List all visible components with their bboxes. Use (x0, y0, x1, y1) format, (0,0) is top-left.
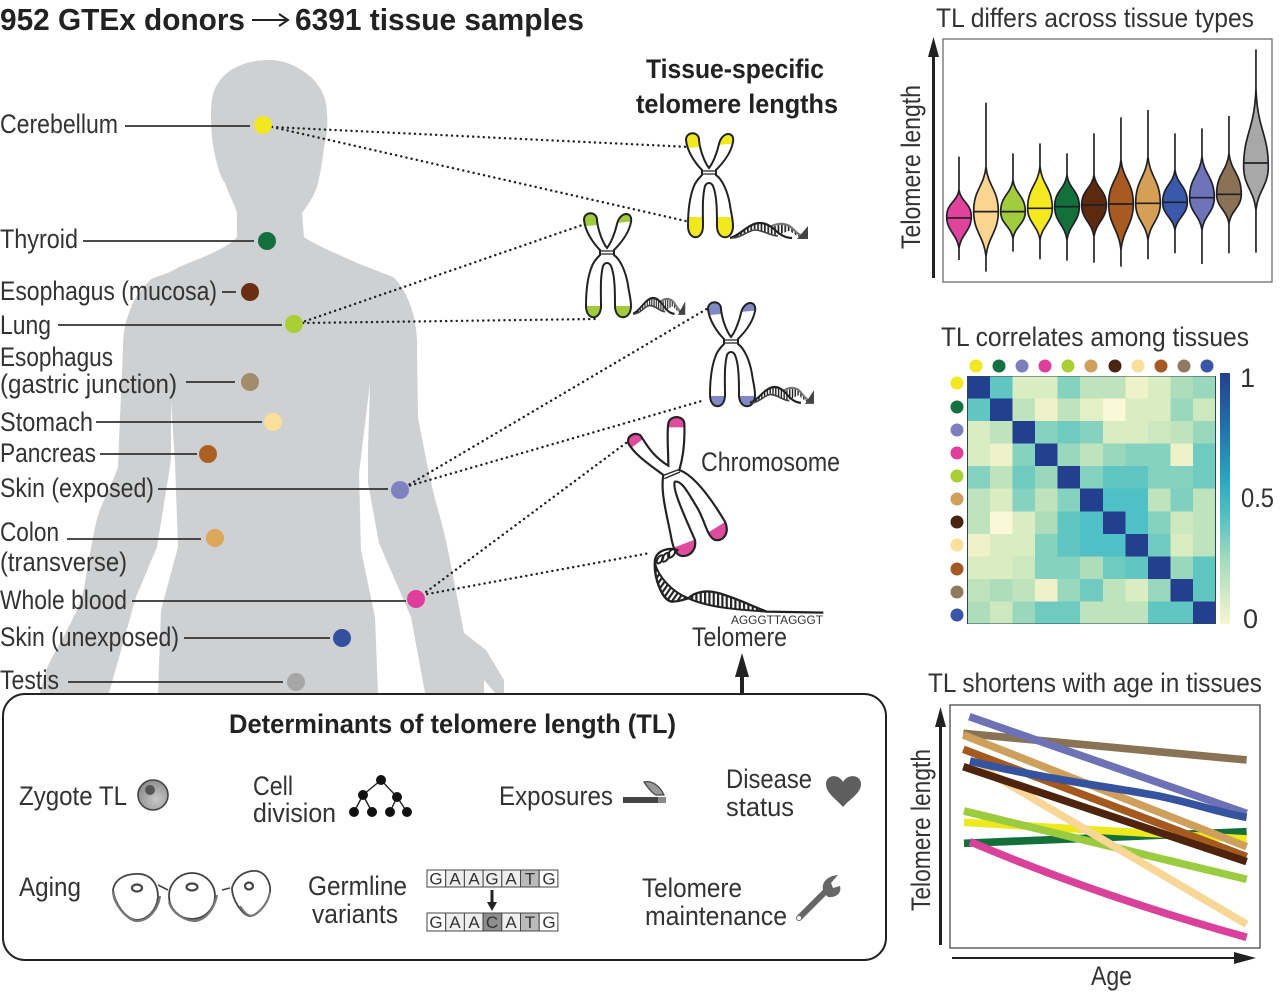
axis label: Telomere length (896, 85, 926, 249)
leader lines (58, 126, 406, 682)
item: aging: Aging (19, 872, 81, 902)
labels: tissue names: Esophagus (0, 342, 113, 372)
labels: tissue names: Thyroid (0, 224, 78, 254)
labels: tissue names: (transverse) (0, 547, 127, 577)
item: germline variants: G (429, 870, 443, 888)
labels: tissue names: Lung (0, 310, 51, 340)
item: germline variants: G (542, 913, 556, 932)
arrow: determinants to telomere (735, 653, 749, 695)
chromosome: pink with telomere helix (623, 413, 823, 613)
heading: tissue-specific telomere lengths: telomere lengths (636, 89, 838, 119)
item: cell division: division (253, 798, 336, 828)
item: exposures: Exposures (499, 781, 613, 811)
x axis arrow (952, 952, 1256, 964)
heading: tissue-specific telomere lengths (636, 54, 838, 119)
item: disease status: status (726, 792, 794, 822)
item: cell division (253, 771, 412, 828)
item: germline variants: Germline (308, 871, 407, 901)
violin chart (896, 37, 1272, 282)
dotted connectors (272, 127, 710, 595)
labels: tissue names: Colon (0, 517, 59, 547)
item: zygote TL: Zygote TL (19, 781, 127, 811)
item: germline variants: variants (312, 899, 398, 929)
x axis label: Age (1091, 961, 1132, 991)
labels: tissue names: Testis (0, 665, 59, 695)
item: germline variants: A (449, 913, 461, 932)
panel: determinants of telomere length (3, 694, 886, 960)
item: germline variants: G (429, 913, 443, 932)
item: germline variants: A (449, 870, 461, 888)
chromosome: yellow (685, 132, 808, 240)
chromosome: blue (707, 301, 814, 408)
item: germline variants (308, 870, 558, 932)
item: germline variants: G (485, 870, 499, 888)
color scale: 0.5 (1241, 483, 1274, 513)
violins (947, 49, 1268, 272)
labels: tissue names: Esophagus (mucosa) (0, 276, 217, 306)
line chart (906, 705, 1260, 991)
item: germline variants: A (468, 913, 480, 932)
item: disease status (726, 764, 861, 822)
labels: tissue names (0, 109, 217, 695)
item: germline variants: A (505, 913, 517, 932)
labels: tissue names: Skin (exposed) (0, 473, 154, 503)
label: telomere sequence: AGGGTTAGGGT (731, 615, 823, 627)
item: aging (19, 871, 270, 921)
y axis label: Telomere length (906, 749, 936, 911)
color scale: 1 (1240, 363, 1255, 393)
item: germline variants: A (468, 870, 480, 888)
heat map top dots (970, 360, 1214, 372)
heading: tissue-specific telomere lengths: Tissue-specific (646, 54, 824, 84)
chart title: TL differs across tissue types: TL differs across tissue types (936, 3, 1254, 33)
labels: tissue names: Cerebellum (0, 109, 118, 139)
labels: tissue names: (gastric junction) (0, 369, 177, 399)
title: 6391 tissue samples (295, 2, 584, 37)
item: germline variants: G (542, 870, 556, 888)
item: germline variants: A (505, 870, 517, 888)
item: disease status: Disease (726, 764, 812, 794)
label: chromosome: Chromosome (701, 447, 840, 477)
labels: tissue names: Stomach (0, 407, 93, 437)
trend lines (963, 717, 1247, 937)
labels: tissue names: Pancreas (0, 438, 96, 468)
labels: tissue names: Skin (unexposed) (0, 622, 179, 652)
heading: Determinants of telomere length (TL) (229, 709, 676, 739)
body silhouette (40, 60, 504, 693)
y axis arrow (935, 707, 946, 945)
chromosome: green (583, 212, 686, 318)
color scale: 0 (1243, 604, 1258, 634)
item: germline variants: C (486, 913, 498, 932)
item: telomere maintenance (642, 873, 840, 931)
labels: tissue names: Whole blood (0, 585, 127, 615)
chart title: TL correlates among tissues: TL correlates among tissues (941, 322, 1249, 352)
item: telomere maintenance: Telomere (642, 873, 742, 903)
item: cell division: Cell (253, 771, 293, 801)
item: germline variants: T (525, 870, 535, 888)
color scale (1220, 363, 1274, 634)
tissue dots (199, 116, 425, 691)
title: 952 GTEx donors (0, 2, 245, 37)
heat map (967, 376, 1216, 624)
axis arrow (928, 37, 939, 278)
item: telomere maintenance: maintenance (645, 901, 787, 931)
item: germline variants: T (525, 913, 535, 932)
label: telomere: Telomere (692, 622, 787, 652)
title (0, 2, 584, 37)
heat map left dots (950, 376, 964, 622)
